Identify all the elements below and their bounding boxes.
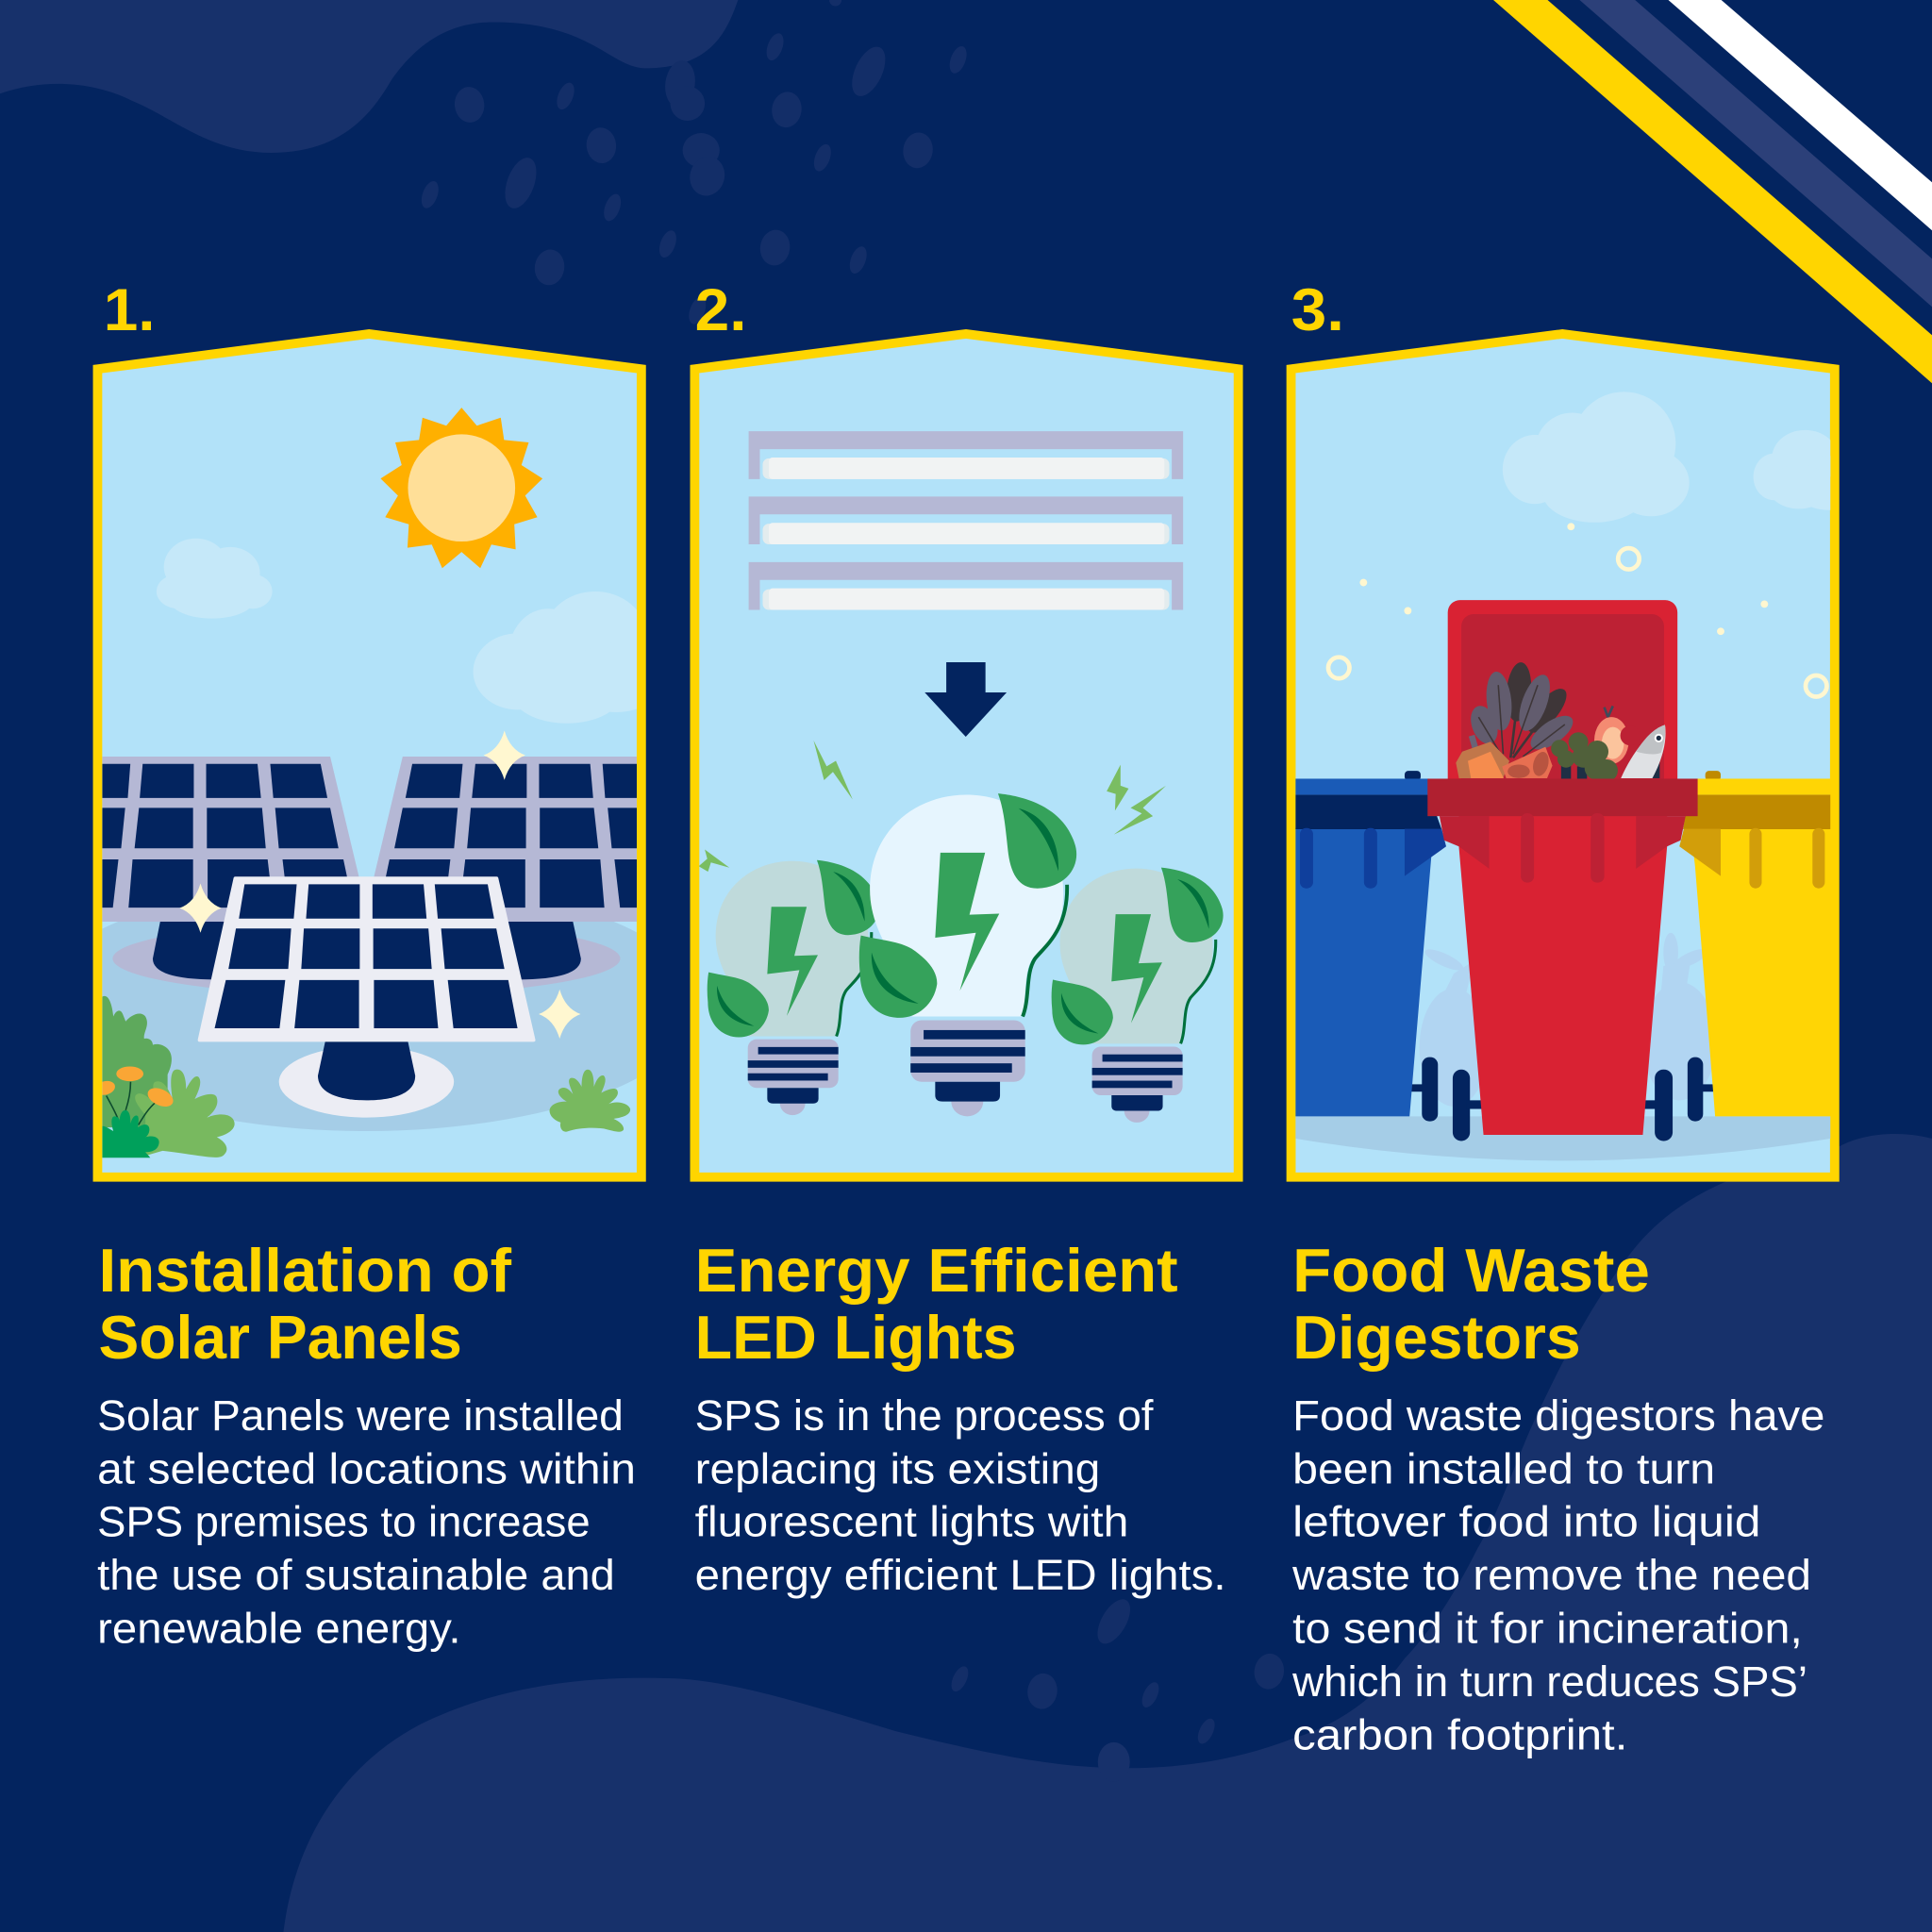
- front solar panel: [200, 878, 534, 1040]
- sparkle top: [484, 731, 525, 780]
- arrow down: [924, 662, 1007, 737]
- ground: [1295, 1116, 1831, 1160]
- text: LED description: energy efficient LED lights.: [695, 1551, 1226, 1599]
- bins scene: [1288, 391, 1865, 1160]
- lighting scene: [699, 431, 1224, 1123]
- number 3: 3.: [1291, 277, 1344, 343]
- back panel stands: [153, 922, 581, 979]
- panel 3: food waste: [1288, 334, 1865, 1177]
- red bin body: [1427, 778, 1698, 1135]
- text: solar description: [97, 1391, 636, 1653]
- text: food waste description: leftover food into liquid: [1292, 1498, 1760, 1546]
- red bin lid: [1448, 600, 1677, 799]
- icon: small cloud: [157, 539, 273, 619]
- text: food waste description: Food waste digestors have: [1292, 1391, 1824, 1440]
- text: food waste description: been installed to turn: [1292, 1444, 1715, 1492]
- back panel base: [113, 938, 621, 988]
- corner stripes: [1493, 0, 1932, 383]
- text: LED description: replacing its existing: [695, 1444, 1100, 1492]
- fish: [1621, 724, 1666, 778]
- decorative dots: [1359, 523, 1768, 635]
- heading: energy efficient LED lights: LED Lights: [695, 1303, 1017, 1372]
- back right solar panel: [374, 757, 637, 922]
- front panel base: [279, 1046, 454, 1118]
- apple core: [1594, 706, 1640, 764]
- heading: food waste digestors: [1292, 1236, 1650, 1372]
- icon: left bulb: [708, 860, 879, 1115]
- icon: center bulb: [859, 793, 1076, 1116]
- text: food waste description: [1291, 1391, 1824, 1758]
- garbage bag right: [1648, 933, 1711, 1100]
- blue bin: [1288, 771, 1446, 1116]
- background blob: bottom right: [283, 1134, 1932, 1932]
- text: food waste description: carbon footprint.: [1292, 1710, 1627, 1758]
- text: food waste description: which in turn reduces SPS’: [1291, 1657, 1807, 1706]
- text: solar description: SPS premises to increase: [97, 1498, 591, 1546]
- ground: [102, 922, 637, 1131]
- garbage bag left: [1419, 949, 1479, 1106]
- pepper: [1456, 736, 1509, 778]
- icon: upper left spark: [813, 741, 853, 800]
- icon: large cloud: [474, 591, 637, 724]
- text: food waste description: to send it for incineration,: [1292, 1605, 1803, 1653]
- background blob: top left: [0, 0, 738, 153]
- fluorescent tube 1: [749, 431, 1183, 479]
- icon: bushes and flowers: [94, 996, 235, 1158]
- heading: energy efficient LED lights: Energy Efficient: [695, 1236, 1178, 1305]
- icon: left spark: [699, 849, 729, 872]
- back left solar panel: [102, 757, 358, 922]
- icon: right bulb: [1052, 868, 1224, 1123]
- text: solar description: Solar Panels were installed: [97, 1391, 624, 1440]
- broccoli: [1551, 732, 1618, 781]
- text: LED description: [695, 1391, 1226, 1599]
- text: solar description: at selected locations within: [97, 1444, 636, 1492]
- number 1: 1.: [104, 277, 156, 343]
- icon: right spark: [1114, 786, 1166, 835]
- yellow bin: [1679, 771, 1842, 1116]
- panel 2 frame: [694, 334, 1239, 1177]
- icon: top right spark: [1107, 765, 1128, 810]
- heading: installation of solar panels: [98, 1236, 511, 1372]
- fluorescent tube 2: [749, 496, 1183, 544]
- text: solar description: renewable energy.: [97, 1605, 460, 1653]
- panel 3 frame: [1291, 334, 1835, 1177]
- tomato: [1502, 747, 1553, 778]
- front panel stand: [318, 1041, 415, 1100]
- decorative rings: [1328, 548, 1826, 696]
- icon: big cloud: [1503, 391, 1690, 523]
- icon: right bush: [550, 1070, 630, 1132]
- food waste: [1456, 661, 1666, 781]
- heading: food waste digestors: Food Waste: [1292, 1236, 1650, 1305]
- text: LED description: SPS is in the process of: [695, 1391, 1154, 1440]
- heading: installation of solar panels: Installation of: [98, 1236, 511, 1305]
- text: solar description: the use of sustainable and: [97, 1551, 615, 1599]
- sparkle left: [179, 883, 222, 933]
- text: food waste description: waste to remove the need: [1291, 1551, 1811, 1599]
- panel 1: solar panels: [92, 329, 646, 1182]
- background splatter drops: [418, 0, 1286, 1782]
- heading: food waste digestors: Digestors: [1292, 1303, 1581, 1372]
- solar scene: [102, 408, 637, 1158]
- icon: sun: [380, 408, 542, 568]
- sparkle right: [539, 990, 580, 1039]
- wheels: [1411, 1058, 1720, 1141]
- panel 1 frame: [97, 334, 641, 1177]
- heading: installation of solar panels: Solar Panels: [98, 1303, 462, 1372]
- leafy greens: [1466, 661, 1578, 758]
- number 2: 2.: [695, 277, 747, 343]
- icon: right cloud: [1753, 430, 1830, 510]
- text: LED description: fluorescent lights with: [695, 1498, 1128, 1546]
- fluorescent tube 3: [749, 562, 1183, 610]
- heading: energy efficient LED lights: [695, 1236, 1178, 1372]
- panel 2: LED lights: [694, 334, 1239, 1177]
